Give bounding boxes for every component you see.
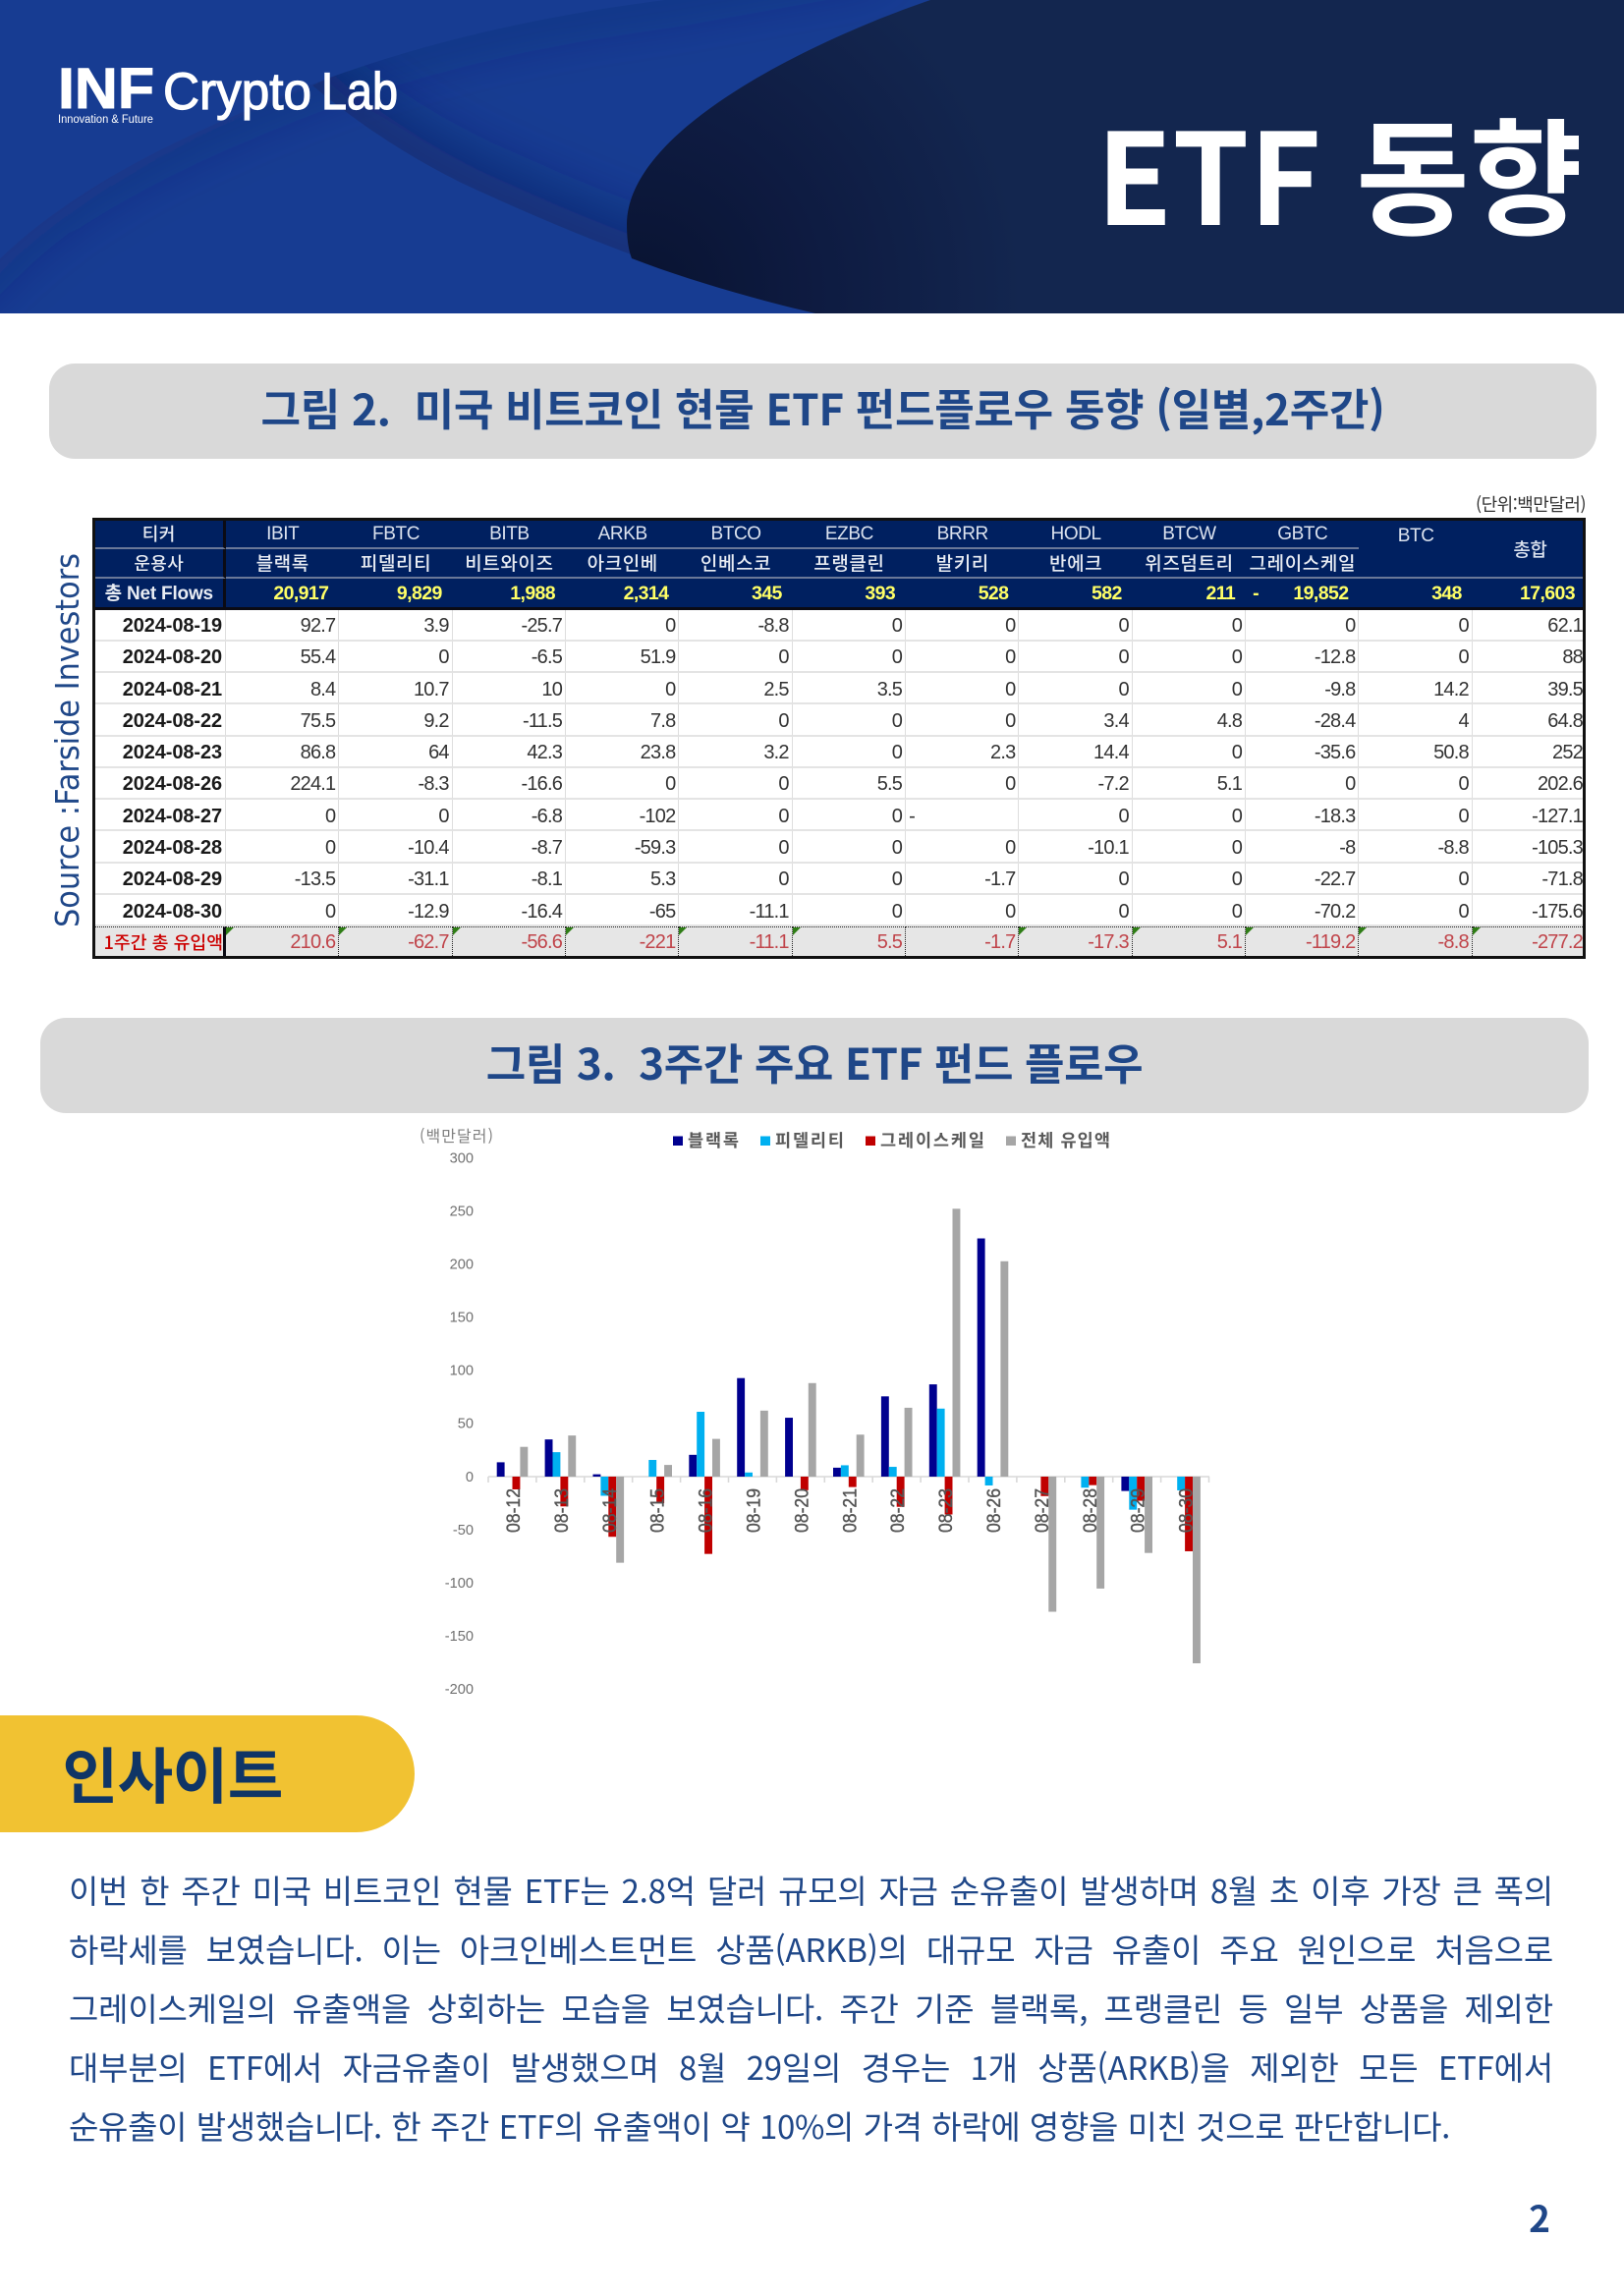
row: 2024-08-21: -9.8 [1324,679,1355,700]
row: 2024-08-26: 224.1 [290,773,335,795]
row: 2024-08-30 [95,895,1583,926]
banner arc shadow [0,171,123,263]
x axis labels: 08-22 [888,1488,909,1533]
row: 2024-08-20: 0 [1005,646,1015,668]
row: weekly total: -1.7 [984,931,1015,953]
row: 2024-08-30: 2024-08-30 [123,901,222,923]
row: weekly total: 210.6 [290,931,335,953]
y axis labels: -100 [445,1576,474,1592]
row: 2024-08-20: -12.8 [1315,646,1355,668]
row: 2024-08-30: -70.2 [1315,901,1355,923]
insight body text: 순유출이 발생했습니다. 한 주간 ETF의 유출액이 약 10%의 가격 하락에 영향을 미친 것으로 판단합니다. [69,2101,1450,2149]
row: 2024-08-26: 0 [778,773,789,795]
row: 2024-08-22: 0 [1005,710,1015,732]
row: 2024-08-21: 2024-08-21 [123,679,222,700]
row: 2024-08-26: -8.3 [418,773,449,795]
row: 2024-08-22: -28.4 [1315,710,1355,732]
row: 2024-08-22: 4.8 [1217,710,1242,732]
row: tickers: BTC [1398,525,1434,546]
row: 2024-08-19: 0 [1458,615,1469,637]
row: issuers: 블랙록 [256,549,309,576]
row: 2024-08-29: -22.7 [1315,868,1355,890]
row: 2024-08-28: -8.7 [532,837,562,859]
row: 2024-08-29: 2024-08-29 [123,868,222,890]
row: 2024-08-19: 0 [1118,615,1129,637]
row: 2024-08-27: -102 [640,806,675,827]
row: 2024-08-29: 0 [1458,868,1469,890]
row: 2024-08-19: 0 [1232,615,1242,637]
row: 2024-08-28: 0 [1005,837,1015,859]
row: 2024-08-22 [95,704,1583,737]
bars 08-30 [1177,1477,1201,1663]
row: 2024-08-28: -8.8 [1438,837,1469,859]
row: 2024-08-27: -127.1 [1532,806,1583,827]
row: 2024-08-23: 42.3 [527,742,562,763]
row: 2024-08-19: 0 [1345,615,1355,637]
x axis labels: 08-14 [600,1488,621,1533]
row: 2024-08-23: 3.2 [763,742,789,763]
x axis labels: 08-21 [840,1488,861,1533]
row: 2024-08-23: 50.8 [1433,742,1469,763]
row: 2024-08-28: 0 [1232,837,1242,859]
row: 2024-08-23: 2.3 [990,742,1015,763]
row: 2024-08-28: 0 [778,837,789,859]
row: tickers: FBTC [372,523,420,544]
row: 2024-08-23: -35.6 [1315,742,1355,763]
row: total net flows: 9,829 [397,583,442,604]
row: 2024-08-23: 23.8 [641,742,675,763]
bars 08-14 [593,1475,624,1563]
row: 2024-08-19: -8.8 [757,615,789,637]
bars 08-12 [497,1447,528,1489]
row: weekly total: -11.1 [750,931,789,953]
y axis labels: 0 [466,1470,474,1485]
row: 2024-08-23 [95,737,1583,768]
row: weekly total: 1주간 총 유입액 [103,929,223,955]
insight pill heading [0,1715,415,1832]
chart legend: 피델리티 [775,1128,844,1152]
row: 2024-08-19: 2024-08-19 [123,615,222,637]
row: 2024-08-22: 0 [778,710,789,732]
insight body text: 그레이스케일의 유출액을 상회하는 모습을 보였습니다. 주간 기준 블랙록, 프랭클린 등 일부 상품을 제외한 [69,1984,1553,2031]
row: 2024-08-20: -6.5 [532,646,562,668]
row: 2024-08-27: -18.3 [1315,806,1355,827]
row: 2024-08-30: 0 [1005,901,1015,923]
row: total net flows: 393 [865,583,895,604]
row: tickers: BITB [489,523,530,544]
row: 2024-08-27: 0 [1458,806,1469,827]
row: total net flows: 345 [752,583,782,604]
row: 2024-08-30: -16.4 [521,901,562,923]
logo: Innovation & Future [58,114,153,126]
row: 2024-08-20: 0 [1232,646,1242,668]
row: tickers: ARKB [598,523,647,544]
row: total net flows: 2,314 [624,583,668,604]
row: issuers: 비트와이즈 [465,549,554,576]
row: 2024-08-21: 10.7 [414,679,449,700]
chart legend [673,1128,1110,1152]
row: total net flows: - [1253,583,1259,604]
row: tickers: EZBC [825,523,873,544]
row: 2024-08-27 [95,800,1583,831]
insight body text [69,1866,1553,2149]
row: weekly total: -221 [640,931,675,953]
row: tickers: HODL [1051,523,1101,544]
row: 2024-08-27: 0 [1118,806,1129,827]
chart unit label: (백만달러) [420,1123,493,1147]
row: weekly total: -62.7 [408,931,449,953]
x axis labels: 08-26 [984,1488,1005,1533]
bars 08-21 [833,1434,865,1487]
row: weekly total: -277.2 [1532,931,1583,953]
y axis labels [445,1151,474,1698]
row: 2024-08-21: 39.5 [1547,679,1583,700]
row: issuers: 운용사 [134,550,184,576]
y axis labels: 300 [450,1151,474,1167]
row: 2024-08-28: -105.3 [1532,837,1583,859]
row: 2024-08-21: 10 [541,679,562,700]
row: 2024-08-27: 0 [778,806,789,827]
x axis labels: 08-20 [792,1488,812,1533]
row: issuers: 프랭클린 [813,549,885,576]
logo: Lab [321,63,398,121]
row: weekly total: 5.1 [1217,931,1242,953]
row: weekly total: 5.5 [877,931,902,953]
x axis labels: 08-27 [1033,1488,1053,1533]
row: 2024-08-29: 0 [1118,868,1129,890]
row: issuers: 아크인베 [588,549,658,576]
row: issuers [95,549,1359,579]
x axis labels: 08-29 [1129,1488,1149,1533]
row: 2024-08-29: 5.3 [650,868,675,890]
page number: 2 [1529,2190,1550,2243]
panel: figure 3 heading: 그림 3. 3주간 주요 ETF 펀드 플로우 [486,1030,1143,1092]
row: 2024-08-23: 252 [1552,742,1583,763]
row: 2024-08-26: 5.1 [1217,773,1242,795]
insight body text: 이번 한 주간 미국 비트코인 현물 ETF는 2.8억 달러 규모의 자금 순유출이 발생하며 8월 초 이후 가장 큰 폭의 [69,1866,1553,1913]
panel: figure 3 heading [40,1018,1589,1113]
bars 08-27 [1040,1477,1056,1612]
row: 2024-08-22: -11.5 [523,710,562,732]
row: 2024-08-19 [95,610,1583,642]
row: 2024-08-21: 14.2 [1433,679,1469,700]
row: total net flows [95,579,1583,610]
row: 2024-08-29: 0 [778,868,789,890]
x axis labels: 08-16 [697,1488,717,1533]
row: 2024-08-20: 0 [1118,646,1129,668]
row: weekly total: -56.6 [521,931,562,953]
bars [497,1208,1201,1663]
row: total net flows: 19,852 [1293,583,1348,604]
bar chart [420,1123,1210,1698]
row: 2024-08-26: 5.5 [877,773,902,795]
row: 2024-08-23: 0 [1232,742,1242,763]
row: 2024-08-19: 0 [665,615,675,637]
bars 08-13 [545,1435,576,1506]
row: 2024-08-20: 0 [892,646,902,668]
row: 2024-08-26: -16.6 [521,773,562,795]
chart legend: 블랙록 [688,1128,739,1152]
row: 2024-08-21: 0 [1005,679,1015,700]
row: weekly total: -119.2 [1306,931,1355,953]
row: 2024-08-19: 0 [892,615,902,637]
row: 2024-08-19: 92.7 [301,615,335,637]
row: 2024-08-19: 62.1 [1547,615,1583,637]
banner base [0,0,1624,313]
row: 2024-08-26 [95,768,1583,800]
row: 2024-08-29 [95,864,1583,895]
row: 2024-08-29: -31.1 [408,868,449,890]
row: tickers: 총합 [1513,534,1546,562]
banner dark shape [627,0,1624,313]
row: 2024-08-21 [95,673,1583,704]
fund flow table [92,517,1586,959]
row: 2024-08-20: 51.9 [641,646,675,668]
row: 2024-08-22: 3.4 [1103,710,1129,732]
row: issuers: 그레이스케일 [1250,549,1356,576]
row: 2024-08-21: 0 [1118,679,1129,700]
x axis labels: 08-19 [745,1488,764,1533]
row: 2024-08-26: 0 [1345,773,1355,795]
bars 08-23 [929,1208,960,1515]
row: 2024-08-21: 2.5 [763,679,789,700]
bars 08-26 [978,1239,1008,1485]
row: 2024-08-19: 3.9 [423,615,449,637]
row: issuers: 위즈덤트리 [1145,549,1234,576]
row: 2024-08-30: 0 [892,901,902,923]
row: weekly total: -17.3 [1088,931,1129,953]
row: 2024-08-20 [95,642,1583,673]
bars 08-15 [648,1460,672,1503]
row: 2024-08-28: 2024-08-28 [123,837,222,859]
row: 2024-08-26: 2024-08-26 [123,773,222,795]
row: 2024-08-29: -1.7 [984,868,1015,890]
row: 2024-08-30: 0 [325,901,335,923]
row: 2024-08-26: -7.2 [1098,773,1129,795]
row: issuers: 반에크 [1049,549,1102,576]
row: 2024-08-30: -12.9 [408,901,449,923]
row: 2024-08-22: 64.8 [1547,710,1583,732]
row: 2024-08-23: 64 [428,742,449,763]
row: 2024-08-27: 0 [1232,806,1242,827]
logo: INF [58,57,154,121]
row: tickers [95,521,1583,956]
row: 2024-08-27: 0 [325,806,335,827]
bars 08-16 [689,1412,720,1554]
row: 2024-08-29: -13.5 [295,868,335,890]
y axis labels: 50 [458,1417,474,1432]
chart legend: 그레이스케일 [880,1128,984,1152]
row: 2024-08-27: - [909,806,915,827]
row: tickers: 티커 [142,521,176,546]
row: total net flows: 211 [1205,583,1235,604]
row: 2024-08-28: -10.4 [408,837,449,859]
row: 2024-08-27: -6.8 [532,806,562,827]
panel: figure 2 heading: 그림 2. 미국 비트코인 현물 ETF 펀드플로우 동향 (일별,2주간) [261,375,1384,438]
header banner [0,0,1624,313]
row: 2024-08-21: 8.4 [310,679,335,700]
row: 2024-08-23: 0 [892,742,902,763]
y axis labels: 100 [450,1364,474,1379]
x axis labels: 08-12 [504,1488,525,1533]
row: tickers: BTCO [710,523,761,544]
row: total net flows: 528 [979,583,1008,604]
row: 2024-08-19: -25.7 [521,615,562,637]
x axis labels: 08-13 [552,1488,573,1533]
y axis labels: -150 [445,1629,474,1645]
row: 2024-08-28 [95,831,1583,864]
panel: figure 2 heading [49,364,1596,459]
row: 2024-08-21: 0 [1232,679,1242,700]
row: 2024-08-23: 86.8 [301,742,335,763]
row: 2024-08-28: -10.1 [1088,837,1129,859]
row: 2024-08-20: 2024-08-20 [123,646,222,668]
row: tickers: BRRR [937,523,988,544]
row: 2024-08-22: 75.5 [301,710,335,732]
bars 08-29 [1121,1477,1152,1553]
chart legend: 전체 유입액 [1021,1128,1110,1152]
row: tickers: IBIT [266,523,299,544]
row: tickers: BTCW [1162,523,1216,544]
row: 2024-08-23: 14.4 [1093,742,1129,763]
row: issuers: 발키리 [936,549,989,576]
row: 2024-08-30: -175.6 [1532,901,1583,923]
row: 2024-08-20: 0 [438,646,449,668]
row: weekly total: -8.8 [1438,931,1469,953]
row: tickers: GBTC [1277,523,1327,544]
row: 2024-08-28: -59.3 [635,837,675,859]
x axis labels: 08-30 [1177,1488,1198,1533]
main title: ETF 동향 [1096,79,1583,262]
y axis labels: -50 [453,1523,474,1539]
row: 2024-08-26: 0 [1005,773,1015,795]
row: 2024-08-28: 0 [325,837,335,859]
x axis labels [504,1488,1198,1533]
row: total net flows: 348 [1431,583,1462,604]
logo [58,57,398,126]
row: 2024-08-28: -8 [1339,837,1355,859]
y axis labels: 150 [450,1311,474,1326]
insight body text: 하락세를 보였습니다. 이는 아크인베스트먼트 상품(ARKB)의 대규모 자금 유출이 주요 원인으로 처음으로 [69,1925,1553,1972]
row: 2024-08-28: 0 [892,837,902,859]
x axis labels: 08-28 [1081,1488,1101,1533]
row: issuers: 인베스코 [700,549,771,576]
logo: Crypto [163,63,311,121]
row: total net flows: 총 Net Flows [105,584,213,604]
row: 2024-08-30: 0 [1232,901,1242,923]
row: 2024-08-29: 0 [1232,868,1242,890]
row: 2024-08-29: -8.1 [532,868,562,890]
y axis labels: 250 [450,1204,474,1220]
insight body text: 대부분의 ETF에서 자금유출이 발생했으며 8월 29일의 경우는 1개 상품(ARKB)을 제외한 모든 ETF에서 [69,2043,1553,2090]
row: 2024-08-23: 2024-08-23 [123,742,222,763]
row: weekly total [95,926,1583,956]
x axis labels: 08-15 [648,1488,669,1533]
row: total net flows: 17,603 [1520,583,1575,604]
row: 2024-08-22: 9.2 [423,710,449,732]
row: 2024-08-29: -71.8 [1541,868,1583,890]
row: 2024-08-27: 2024-08-27 [123,806,222,827]
row: 2024-08-26: 0 [1458,773,1469,795]
row: 2024-08-30: 0 [1118,901,1129,923]
row: 2024-08-27: 0 [438,806,449,827]
row: 2024-08-20: 0 [1458,646,1469,668]
row: 2024-08-30: -11.1 [750,901,789,923]
row: 2024-08-30: -65 [649,901,675,923]
row: 2024-08-21: 0 [665,679,675,700]
row: 2024-08-20: 88 [1562,646,1583,668]
row: 2024-08-27: 0 [892,806,902,827]
bars 08-19 [737,1378,768,1477]
x axis labels: 08-23 [936,1488,957,1533]
row: 2024-08-22: 0 [892,710,902,732]
row: 2024-08-26: 202.6 [1538,773,1583,795]
row: 2024-08-22: 4 [1458,710,1469,732]
row: 2024-08-22: 2024-08-22 [123,710,222,732]
row: 2024-08-20: 55.4 [301,646,335,668]
row: 2024-08-21: 3.5 [877,679,902,700]
insight title text: 인사이트 [63,1728,283,1816]
bars 08-28 [1081,1477,1104,1589]
bars 08-22 [881,1396,912,1507]
row: 2024-08-29: 0 [892,868,902,890]
zero axis [488,1477,1209,1483]
y axis labels: -200 [445,1682,474,1698]
row: total net flows: 1,988 [510,583,555,604]
bars 08-20 [785,1383,816,1490]
row: 2024-08-22: 7.8 [650,710,675,732]
row: 2024-08-20: 0 [778,646,789,668]
row: total net flows: 582 [1092,583,1122,604]
row: 2024-08-30: 0 [1458,901,1469,923]
row: 2024-08-19: 0 [1005,615,1015,637]
row: issuers: 피델리티 [361,549,431,576]
row: 2024-08-26: 0 [665,773,675,795]
y axis labels: 200 [450,1258,474,1273]
row: total net flows: 20,917 [273,583,328,604]
banner wedge shadow [312,69,631,253]
